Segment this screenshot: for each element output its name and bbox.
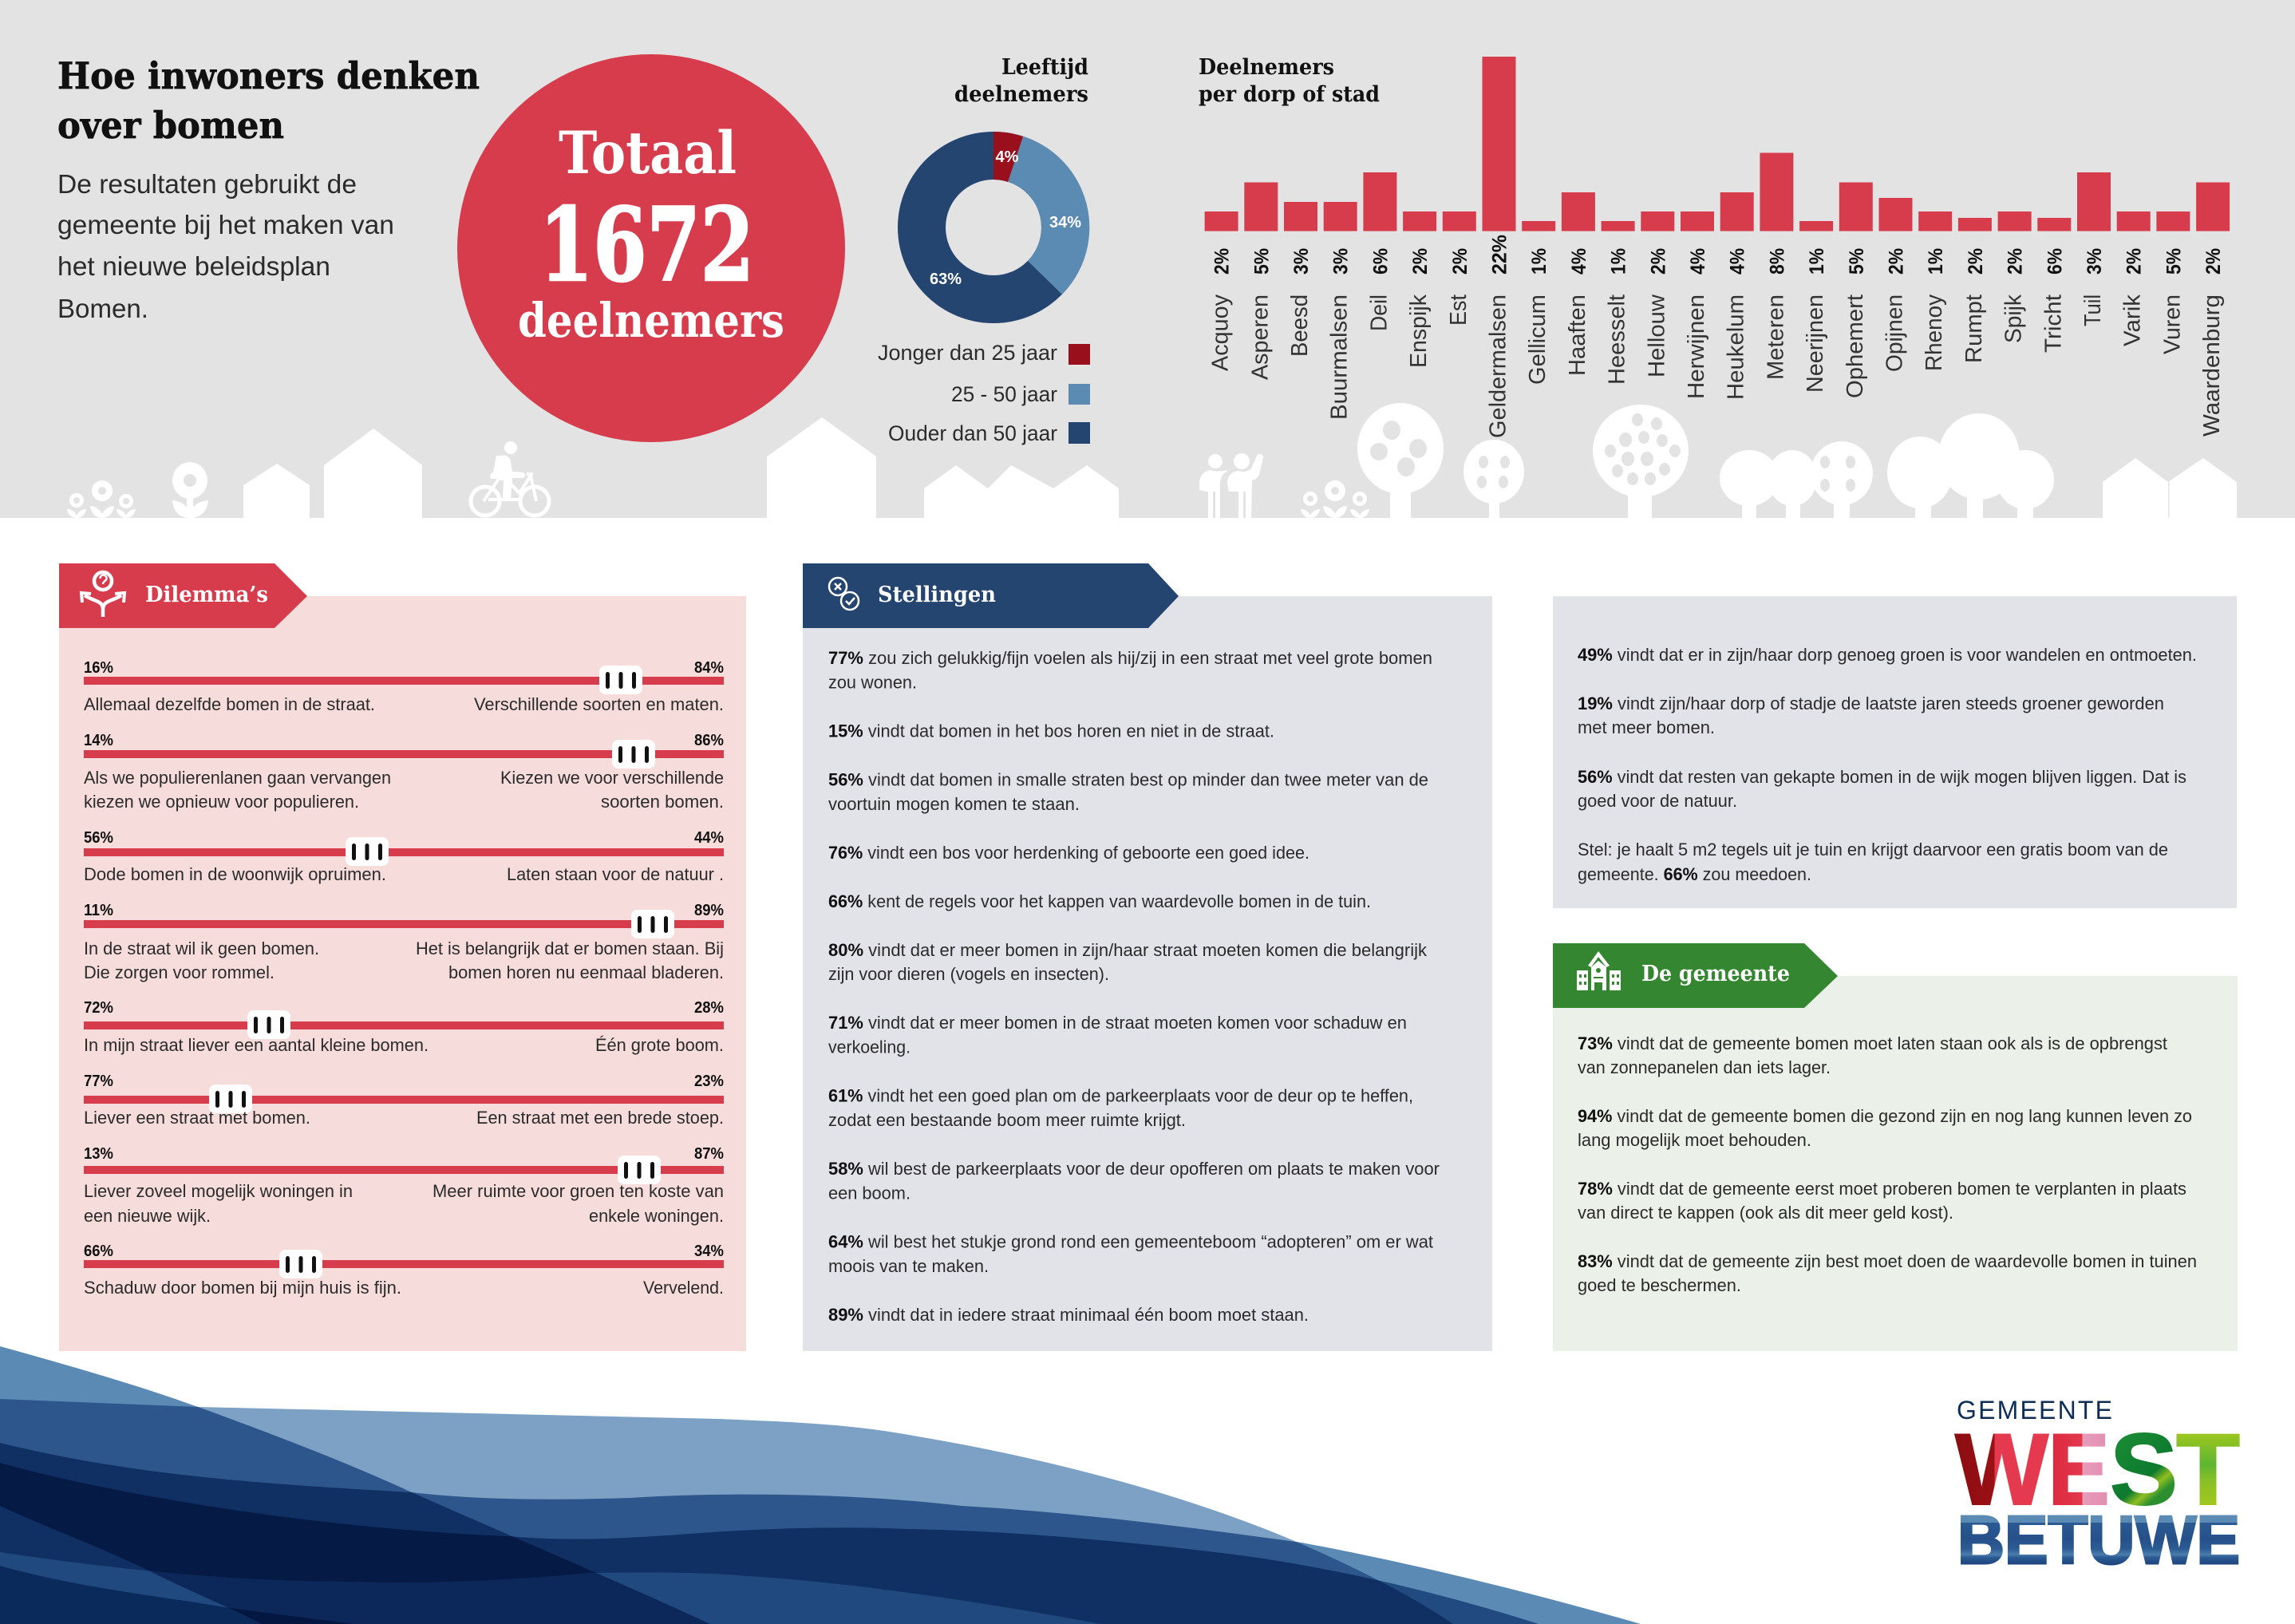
ribbon: de gemeente: De gemeente [1641, 962, 1790, 986]
dilemma row 6 [84, 1073, 724, 1128]
dilemma row 8: 66% [84, 1243, 113, 1260]
dilemma row 3: 44% [694, 829, 724, 847]
panel: dilemma's [59, 563, 746, 1351]
icon: cyclist [471, 441, 549, 516]
panel: stellingen continued [1553, 596, 2237, 908]
panel: stellingen continued: met meer bomen. [1578, 717, 1715, 737]
statements text: 76% vindt een bos voor herdenking of geboorte een goed idee. [828, 843, 1309, 863]
statements text: 58% wil best de parkeerplaats voor de deur opofferen om plaats te maken voor [828, 1159, 1440, 1179]
village name labels: Waardenburg [2199, 294, 2225, 437]
bar value labels: 6% [1369, 248, 1392, 275]
dilemma row 2 [84, 732, 724, 812]
bar value labels: 1% [1925, 248, 1947, 275]
dilemma row 8 [84, 1243, 724, 1298]
dilemma row 4 [84, 902, 724, 982]
dilemma row 2: 14% [84, 732, 113, 749]
dilemma row 6: 23% [694, 1073, 724, 1090]
village name labels: Heukelum [1724, 294, 1749, 400]
dilemma row 2: Als we populierenlanen gaan vervangen [84, 768, 391, 788]
bar value labels: 5% [1250, 248, 1273, 275]
statements text: 56% vindt dat bomen in smalle straten best op minder dan twee meter van de [828, 769, 1428, 789]
icon: cross and check [829, 578, 859, 610]
intro text [57, 169, 394, 323]
header band [0, 0, 2295, 518]
icon: three flowers left [67, 480, 136, 518]
bar value labels: 4% [1727, 248, 1749, 275]
dilemma row 3: Laten staan voor de natuur . [507, 864, 724, 884]
municipality statements text: 73% vindt dat de gemeente bomen moet laten staan ook als is de opbrengst [1578, 1033, 2167, 1053]
municipality statements text: van zonnepanelen dan iets lager. [1578, 1057, 1831, 1077]
dilemma row 6: Een straat met een brede stoep. [476, 1108, 724, 1128]
icon: apple tree [1357, 403, 1444, 518]
heading: per village: Deelnemers [1199, 55, 1334, 80]
dilemma row 3 [84, 829, 724, 884]
dilemma row 8: Schaduw door bomen bij mijn huis is fijn. [84, 1278, 401, 1298]
village name labels: Heesselt [1605, 294, 1630, 385]
bar value labels: 6% [2044, 248, 2066, 275]
dilemma row 5: Één grote boom. [595, 1035, 724, 1055]
icon: three trees with pears [1720, 441, 1873, 518]
dilemma row 1: Verschillende soorten en maten. [474, 694, 724, 714]
village name labels: Opijnen [1882, 294, 1907, 372]
dilemma row 1 [84, 659, 724, 714]
bar value labels: 3% [2084, 248, 2106, 275]
icon: large tree group [1887, 413, 2054, 518]
dilemma row 3: Dode bomen in de woonwijk opruimen. [84, 864, 386, 884]
total circle: 1672 [539, 186, 754, 304]
bar value labels: 2% [1211, 248, 1234, 275]
statements text [828, 648, 1440, 1325]
village name labels: Vuren [2159, 294, 2185, 354]
icon: tall house [324, 429, 422, 518]
bar value labels [1211, 235, 2225, 275]
logo: gemeente west betuwe: GEMEENTE [1957, 1396, 2112, 1424]
village name labels: Varik [2120, 294, 2146, 346]
icon: small house [243, 464, 310, 518]
title: over bomen [57, 104, 284, 147]
village name labels: Spijk [2001, 294, 2027, 343]
village name labels: Acquoy [1208, 294, 1234, 371]
dilemma row 1: 16% [84, 659, 113, 677]
village name labels: Herwijnen [1684, 294, 1709, 399]
bar value labels: 1% [1806, 248, 1828, 275]
municipality statements text: goed te beschermen. [1578, 1275, 1741, 1295]
ribbon: dilemma's: Dilemma’s [145, 583, 268, 607]
ribbon: stellingen [803, 563, 1179, 628]
statements text: verkoeling. [828, 1037, 910, 1057]
heading: age: Leeftijd [1001, 55, 1088, 80]
bar value labels: 22% [1489, 235, 1511, 275]
bar value labels: 2% [1965, 248, 1987, 275]
dilemma row 6: Liever een straat met bomen. [84, 1108, 310, 1128]
village name labels: Est [1446, 294, 1471, 326]
village name labels: Beesd [1287, 294, 1313, 357]
logo: gemeente west betuwe: T [2176, 1413, 2240, 1526]
village name labels: Tricht [2040, 294, 2066, 353]
intro text: gemeente bij het maken van [57, 210, 394, 239]
dilemma row 4: In de straat wil ik geen bomen. [84, 938, 319, 958]
dilemma row 7: 13% [84, 1145, 113, 1163]
legend: age: Jonger dan 25 jaar [878, 341, 1057, 365]
icon: two people waving [1199, 453, 1263, 518]
dilemma row 2: soorten bomen. [601, 792, 724, 812]
statements text: moois van te maken. [828, 1256, 989, 1276]
icon: round fruit tree [1593, 405, 1689, 518]
blue wave decoration [0, 1346, 1641, 1624]
total circle [457, 54, 845, 442]
village name labels: Ophemert [1843, 294, 1868, 398]
municipality statements text: van direct te kappen (ook als dit meer geld kost). [1578, 1203, 1953, 1223]
dilemma row 8: Vervelend. [643, 1278, 724, 1298]
statements text: 80% vindt dat er meer bomen in zijn/haar straat moeten komen die belangrijk [828, 940, 1428, 960]
donut chart: age: 34% [1049, 214, 1081, 231]
icon: pear tree [1464, 440, 1524, 518]
dilemma row 4: bomen horen nu eenmaal bladeren. [448, 962, 724, 982]
panel: stellingen continued: 56% vindt dat resten van gekapte bomen in de wijk mogen blijven liggen. Dat is [1578, 767, 2186, 787]
statements text: 61% vindt het een goed plan om de parkeerplaats voor de deur op te heffen, [828, 1086, 1413, 1106]
village name labels: Neerijnen [1803, 294, 1828, 393]
bar value labels: 3% [1290, 248, 1313, 275]
donut chart: age: 63% [930, 271, 962, 288]
village name labels: Haaften [1565, 294, 1590, 376]
dilemma row 6: 77% [84, 1073, 113, 1090]
municipality statements text: 78% vindt dat de gemeente eerst moet proberen bomen te verplanten in plaats [1578, 1179, 2186, 1199]
logo: gemeente west betuwe: W [1955, 1413, 2048, 1526]
dilemma row 7: Liever zoveel mogelijk woningen in [84, 1181, 353, 1201]
dilemma row 5: 28% [694, 999, 724, 1017]
dilemma row 1: Allemaal dezelfde bomen in de straat. [84, 694, 375, 714]
white village silhouettes [67, 403, 2237, 518]
dilemma row 4: 89% [694, 902, 724, 919]
dilemma row 2: Kiezen we voor verschillende [500, 768, 724, 788]
bar value labels: 2% [1647, 248, 1669, 275]
statements text: zou wonen. [828, 672, 917, 692]
dilemma row 5: 72% [84, 999, 113, 1017]
bar value labels: 4% [1568, 248, 1590, 275]
village name labels: Rumpt [1961, 294, 1987, 363]
dilemma row 2: 86% [694, 732, 724, 749]
bar value labels: 8% [1766, 248, 1788, 275]
title: Hoe inwoners denken [57, 54, 480, 97]
icon: town hall [1577, 951, 1621, 990]
icon: two houses right [2103, 458, 2237, 518]
dilemma row 7: enkele woningen. [589, 1206, 724, 1226]
dilemma row 5 [84, 999, 724, 1055]
panel: stellingen continued: gemeente. 66% zou meedoen. [1578, 864, 1811, 884]
icon: question and diverging arrows [81, 572, 124, 617]
statements text: 15% vindt dat bomen in het bos horen en niet in de straat. [828, 721, 1274, 741]
legend: age: Ouder dan 50 jaar [888, 421, 1057, 445]
intro text: het nieuwe beleidsplan [57, 251, 330, 281]
bar value labels: 2% [2123, 248, 2146, 275]
statements text: 66% kent de regels voor het kappen van waardevolle bomen in de tuin. [828, 891, 1371, 911]
dilemma row 4: Het is belangrijk dat er bomen staan. Bij [416, 938, 724, 958]
dilemma row 7 [84, 1145, 724, 1226]
bar chart: participants per village [1205, 57, 2230, 438]
donut chart: age: 4% [996, 148, 1019, 166]
statements text: 71% vindt dat er meer bomen in de straat moeten komen voor schaduw en [828, 1013, 1407, 1033]
village name labels [1208, 294, 2225, 438]
bar value labels: 2% [1409, 248, 1432, 275]
bar value labels: 2% [2005, 248, 2027, 275]
dilemma row 5: In mijn straat liever een aantal kleine bomen. [84, 1035, 429, 1055]
logo: gemeente west betuwe [1955, 1396, 2240, 1579]
intro text: Bomen. [57, 294, 148, 323]
dilemma row 7: 87% [694, 1145, 724, 1163]
dilemma row 8: 34% [694, 1243, 724, 1260]
statements text: een boom. [828, 1183, 910, 1203]
panel: stellingen continued: Stel: je haalt 5 m2 tegels uit je tuin en krijgt daarvoor een gratis boom van de [1578, 840, 2168, 859]
bar value labels: 1% [1528, 248, 1550, 275]
bar value labels: 5% [1846, 248, 1868, 275]
donut chart: age [898, 132, 1089, 323]
dilemma row 4: Die zorgen voor rommel. [84, 962, 275, 982]
icon: large flower [172, 462, 208, 518]
heading: per village [1199, 55, 1380, 107]
legend: age: 25 - 50 jaar [951, 382, 1057, 406]
statements text: 77% zou zich gelukkig/fijn voelen als hij/zij in een straat met veel grote bomen [828, 648, 1432, 668]
village name labels: Tuil [2080, 294, 2106, 326]
total circle: deelnemers [518, 293, 784, 348]
bar value labels: 5% [2163, 248, 2185, 275]
logo: gemeente west betuwe: E [2048, 1413, 2110, 1526]
logo: gemeente west betuwe: BETUWE [1957, 1503, 2240, 1579]
icon: flowers right [1301, 480, 1369, 518]
village name labels: Asperen [1247, 294, 1273, 380]
statements text: voortuin mogen komen te staan. [828, 794, 1080, 814]
total circle: Totaal [559, 119, 737, 188]
bar value labels: 3% [1330, 248, 1353, 275]
municipality statements text: lang mogelijk moet behouden. [1578, 1130, 1811, 1150]
panel: de gemeente [1553, 943, 2238, 1351]
ribbon: stellingen: Stellingen [878, 583, 996, 607]
bar value labels: 2% [1449, 248, 1471, 275]
heading: age [954, 55, 1088, 107]
village name labels: Geldermalsen [1486, 294, 1511, 438]
village name labels: Rhenoy [1922, 294, 1947, 371]
intro text: De resultaten gebruikt de [57, 169, 357, 199]
logo: gemeente west betuwe: S [2110, 1413, 2178, 1526]
bar value labels: 1% [1608, 248, 1630, 275]
village name labels: Gellicum [1525, 294, 1550, 385]
dilemma row 1: 84% [694, 659, 724, 677]
dilemma row 7: Meer ruimte voor groen ten koste van [433, 1181, 724, 1201]
village name labels: Enspijk [1406, 294, 1432, 368]
statements text: 89% vindt dat in iedere straat minimaal één boom moet staan. [828, 1305, 1309, 1325]
dilemma row 4: 11% [84, 902, 113, 919]
dilemma row 2: kiezen we opnieuw voor populieren. [84, 792, 359, 812]
statements text: zodat een bestaande boom meer ruimte krijgt. [828, 1110, 1186, 1130]
legend: age [878, 341, 1090, 445]
dilemma row 7: een nieuwe wijk. [84, 1206, 211, 1226]
heading: per village: per dorp of stad [1199, 82, 1380, 107]
village name labels: Deil [1366, 294, 1392, 331]
panel: stellingen continued: goed voor de natuur. [1578, 791, 1737, 811]
panel: stellingen continued: 49% vindt dat er in zijn/haar dorp genoeg groen is voor wandelen en ontmoeten. [1578, 645, 2197, 665]
municipality statements text: 83% vindt dat de gemeente zijn best moet doen de waardevolle bomen in tuinen [1578, 1251, 2197, 1271]
bar value labels: 4% [1687, 248, 1709, 275]
ribbon: dilemma's [59, 563, 307, 628]
statements text: 64% wil best het stukje grond rond een gemeenteboom “adopteren” om er wat [828, 1231, 1433, 1251]
panel: stellingen continued: 19% vindt zijn/haar dorp of stadje de laatste jaren steeds groener geworden [1578, 693, 2164, 713]
ribbon: de gemeente [1553, 943, 1838, 1008]
village name labels: Buurmalsen [1327, 294, 1353, 420]
municipality statements text [1578, 1033, 2197, 1295]
bar value labels: 2% [1885, 248, 1907, 275]
icon: row of three houses [924, 465, 1119, 518]
municipality statements text: 94% vindt dat de gemeente bomen die gezond zijn en nog lang kunnen leven zo [1578, 1106, 2192, 1126]
village name labels: Meteren [1763, 294, 1788, 380]
statements text: zijn voor dieren (vogels en insecten). [828, 964, 1109, 984]
icon: house centre [767, 417, 876, 518]
village name labels: Hellouw [1644, 294, 1669, 377]
panel: stellingen [803, 563, 1492, 1351]
title [57, 54, 480, 147]
dilemma row 3: 56% [84, 829, 113, 847]
heading: age: deelnemers [954, 82, 1088, 107]
bar value labels: 2% [2202, 248, 2225, 275]
